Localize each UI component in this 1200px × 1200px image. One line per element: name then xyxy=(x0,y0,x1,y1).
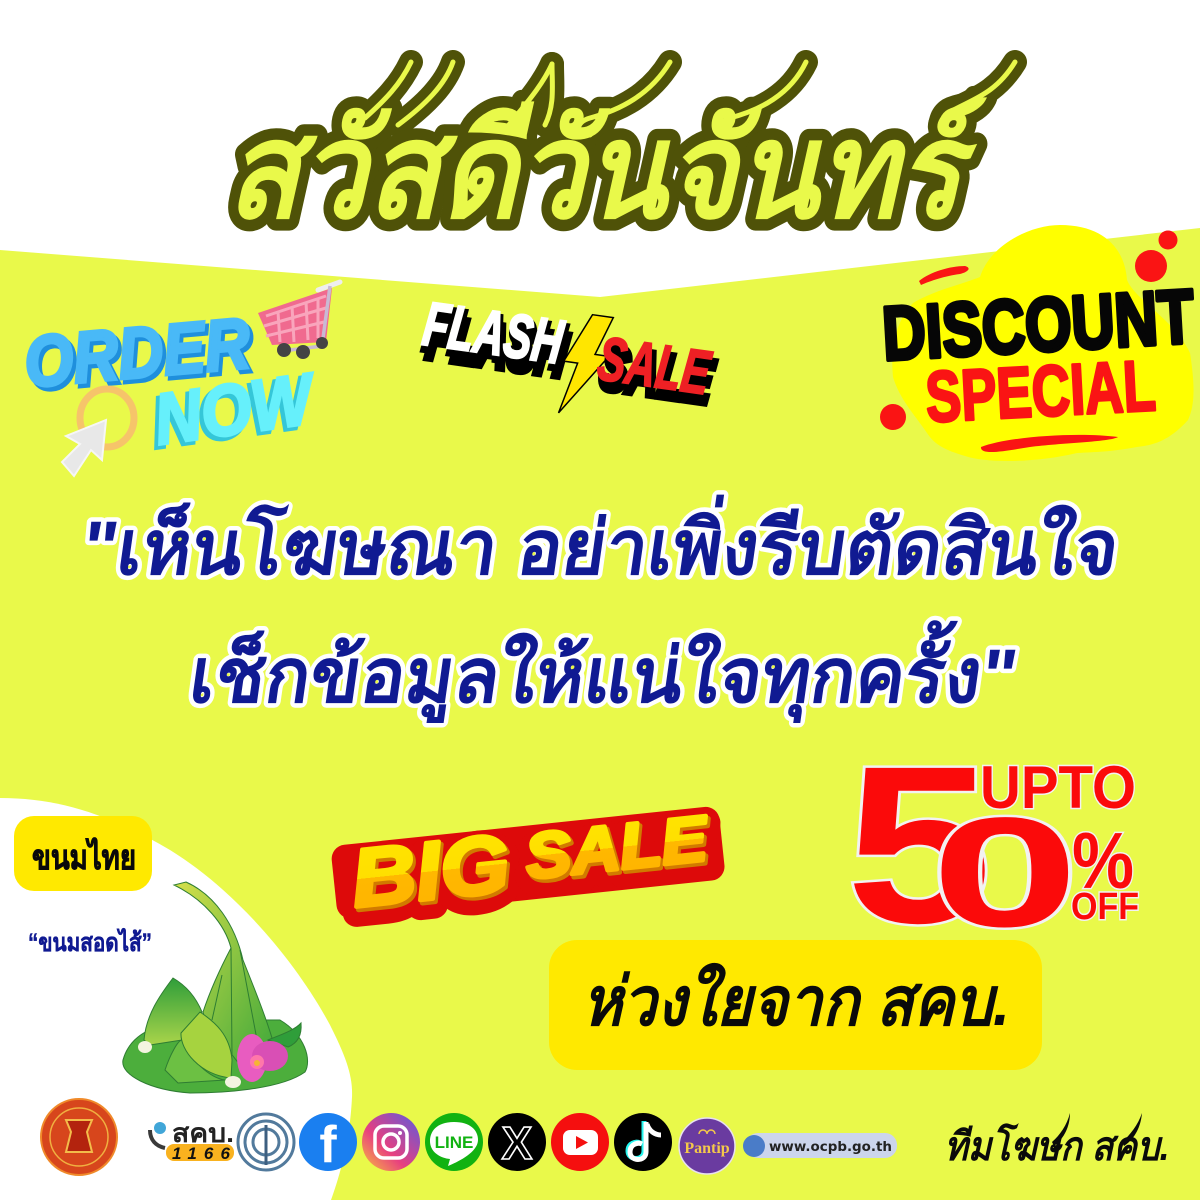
red accents xyxy=(880,230,1178,452)
website pill xyxy=(743,1133,897,1158)
title tails outline xyxy=(365,62,1015,135)
icon: hotline 1166 xyxy=(150,1118,234,1163)
banana leaf base xyxy=(123,1020,308,1093)
title: สวัสดีวันจันทร์ xyxy=(226,97,987,246)
dessert name: “ขนมสอดไส้” xyxy=(28,927,152,957)
headline line 2: เช็กข้อมูลให้แน่ใจทุกครั้ง" xyxy=(184,619,1025,724)
right small leaf xyxy=(268,1023,301,1047)
sale text: SALE xyxy=(522,809,713,900)
icon: click ring xyxy=(80,389,134,447)
tall leaf xyxy=(174,882,272,1065)
lower fold xyxy=(165,1040,225,1083)
label: Thai dessert: ขนมไทย xyxy=(32,837,136,877)
flash sale badge xyxy=(414,290,721,434)
headline xyxy=(77,494,1126,724)
label: Thai dessert xyxy=(14,816,152,891)
icon: x: X xyxy=(502,1117,533,1169)
yellow blob xyxy=(892,225,1194,461)
upto text: UPTO xyxy=(980,754,1136,821)
number 50 xyxy=(846,720,1079,970)
headline line 1: "เห็นโฆษณา อย่าเพิ่งรีบตัดสินใจ xyxy=(77,494,1126,591)
callout: concern from OCPB xyxy=(549,940,1042,1070)
percent text: % xyxy=(1072,816,1134,905)
icon: hotline 1166: สคบ. xyxy=(172,1118,234,1148)
icon: youtube xyxy=(551,1113,609,1171)
website pill: www.ocpb.go.th xyxy=(769,1139,892,1155)
big text: BIG xyxy=(349,821,516,928)
icon: pantip: Pantip xyxy=(684,1140,730,1157)
jasmine buds xyxy=(138,1041,241,1088)
icon: facebook xyxy=(299,1113,357,1174)
callout: concern from OCPB: ห่วงใยจาก สคบ. xyxy=(582,962,1010,1040)
number 50: 5 xyxy=(846,720,992,970)
signature: ทีมโฆษก สคบ. xyxy=(944,1122,1170,1169)
now text: NOW xyxy=(149,358,322,460)
flash text: FLASH xyxy=(420,295,569,383)
big text: BIG xyxy=(347,818,514,925)
sale text: SALE xyxy=(596,334,718,418)
big sale badge xyxy=(329,796,727,934)
now text: NOW xyxy=(146,362,319,464)
front fold xyxy=(181,1012,232,1078)
up to 50 percent off badge xyxy=(846,720,1139,970)
icon: instagram xyxy=(362,1113,420,1171)
flash text: FLASH xyxy=(419,290,568,378)
tall leaf veins xyxy=(212,948,258,1055)
red sticker xyxy=(330,806,726,920)
icon: hotline 1166: 1166 xyxy=(172,1144,231,1163)
order text: ORDER xyxy=(24,307,256,407)
icon: OCPB logo xyxy=(238,1114,294,1170)
icon: tiktok xyxy=(614,1113,672,1171)
icon: line: LINE xyxy=(435,1133,473,1152)
icon: x xyxy=(488,1113,546,1171)
orchid flower xyxy=(237,1034,288,1082)
icon: lightning bolt xyxy=(557,312,614,419)
icon: pantip xyxy=(679,1118,735,1174)
sale text: SALE xyxy=(522,802,713,893)
sale text: SALE xyxy=(594,324,715,408)
icon: line xyxy=(425,1113,483,1171)
off text: OFF xyxy=(1071,886,1139,928)
icon: government seal xyxy=(41,1099,117,1175)
sale text: SALE xyxy=(524,805,715,896)
illustration: khanom sod sai leaf dessert xyxy=(123,882,308,1093)
icon: shopping cart xyxy=(258,282,340,359)
discount special badge xyxy=(880,225,1196,461)
number 50: 0 xyxy=(931,786,1079,960)
left fold xyxy=(144,978,202,1045)
title tails fill xyxy=(365,62,1015,135)
order now badge xyxy=(21,282,340,476)
flash text xyxy=(417,290,574,391)
flash text: FLASH xyxy=(423,303,572,391)
order text: ORDER xyxy=(21,304,253,403)
big text: BIG xyxy=(348,825,515,932)
icon: cursor arrow xyxy=(62,420,106,476)
white corner panel xyxy=(0,798,352,1200)
icon: facebook: f xyxy=(319,1116,337,1174)
